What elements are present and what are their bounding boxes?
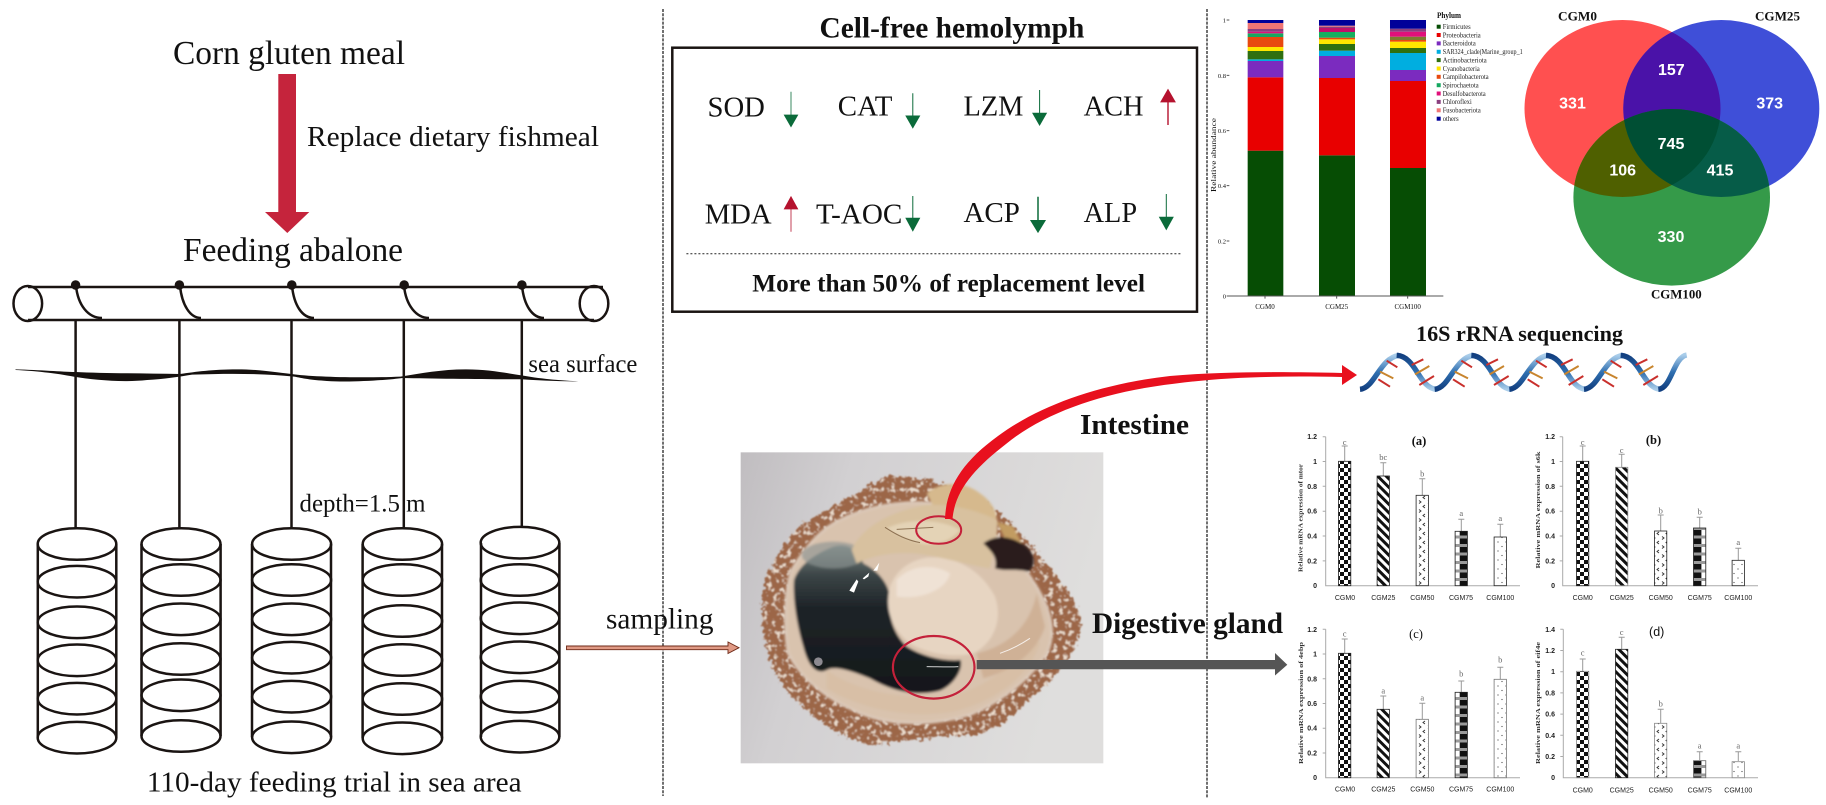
- chart (c): mRNA expression of 4ebp: [1298, 627, 1520, 794]
- axis tick labels: 0.2: [1218, 238, 1226, 246]
- significance letters: [1581, 437, 1740, 547]
- legend: phylum: Firmicutes: [1443, 22, 1471, 31]
- panel letter: (d): [1649, 625, 1664, 639]
- significance letters: b: [1698, 506, 1702, 516]
- highlights: [849, 563, 879, 593]
- x labels: CGM75: [1449, 787, 1473, 794]
- sea surface wave: [16, 369, 578, 382]
- label: sampling: sampling: [606, 603, 714, 635]
- gray patch: [802, 542, 865, 568]
- venn: shared by all: 745: [1658, 136, 1684, 153]
- shell rim: [762, 475, 1081, 745]
- arrow: CAT down: [906, 93, 920, 128]
- panel: cell-free hemolymph: [672, 48, 1197, 312]
- legend: phylum: Campilobacterota: [1443, 72, 1489, 81]
- icon: DNA helix: [1360, 355, 1687, 389]
- label: replace dietary fishmeal: Replace dietary fishmeal: [307, 121, 599, 153]
- marker: ACH: ACH: [1084, 90, 1144, 122]
- cage 1: [38, 528, 116, 754]
- significance letters: c: [1343, 629, 1347, 639]
- x labels: [1573, 787, 1752, 794]
- y ticks: 0.4: [1307, 534, 1317, 540]
- y ticks: 0.2: [1307, 750, 1317, 758]
- venn: CGM0 and CGM100: 106: [1609, 162, 1636, 180]
- x labels: CGM100: [1486, 787, 1514, 794]
- y title: Relative mRNA expression of mtor: [1298, 464, 1304, 572]
- y ticks: 1.2: [1545, 648, 1555, 655]
- significance letters: a: [1698, 740, 1702, 750]
- y ticks: [1307, 434, 1317, 590]
- significance letters: a: [1459, 508, 1463, 518]
- y ticks: 0: [1313, 583, 1317, 590]
- label: sea surface: sea surface: [528, 351, 637, 378]
- x labels: CGM50: [1410, 787, 1434, 794]
- arrow: SOD down: [784, 92, 798, 127]
- significance letters: c: [1581, 437, 1585, 447]
- y ticks: 1: [1551, 459, 1555, 466]
- arrow: ACH up: [1161, 90, 1175, 125]
- significance letters: b: [1459, 669, 1463, 679]
- cage 4: [363, 528, 442, 754]
- arrow: intestine to sequencing: [945, 365, 1357, 519]
- legend: phylum: Fusobacteriota: [1443, 106, 1481, 115]
- cage 5: [481, 527, 559, 752]
- chart: phylum stacked bars: [1209, 10, 1523, 311]
- marker: intestine ring: [916, 516, 961, 544]
- x labels: CGM75: [1688, 595, 1712, 602]
- chart (b): mRNA expression of s6k: [1535, 433, 1758, 602]
- y ticks: 0.6: [1545, 509, 1555, 516]
- heading: feeding abalone: Feeding abalone: [183, 232, 403, 269]
- venn label: CGM0: CGM0: [1558, 9, 1597, 24]
- bars: [1576, 649, 1744, 778]
- legend: phylum: Actinobacteriota: [1443, 55, 1487, 64]
- venn: CGM0 only: 331: [1559, 96, 1586, 112]
- marker: ACP: ACP: [964, 197, 1020, 229]
- venn label: CGM100: CGM100: [1651, 286, 1702, 301]
- x labels: CGM0: [1573, 787, 1593, 794]
- x labels: CGM25: [1610, 787, 1634, 794]
- caption: feeding trial: 110-day feeding trial in sea area: [147, 768, 522, 799]
- legend: phylum: Phylum: [1437, 10, 1461, 20]
- x labels: CGM25: [1371, 787, 1395, 794]
- panel letter: (c): [1409, 627, 1423, 641]
- y ticks: 1.2: [1307, 627, 1317, 634]
- axis tick labels: CGM100: [1394, 303, 1421, 311]
- significance letters: c: [1343, 437, 1347, 447]
- marker: LZM: LZM: [964, 90, 1023, 122]
- y ticks: [1307, 627, 1317, 782]
- y ticks: 0.8: [1307, 484, 1317, 491]
- x labels: CGM0: [1573, 595, 1593, 602]
- muscle: [888, 557, 998, 655]
- marker: SOD: SOD: [708, 92, 765, 124]
- significance letters: [1343, 437, 1502, 523]
- chart: venn diagram: [1524, 9, 1819, 301]
- error bars: [1580, 637, 1741, 761]
- y ticks: [1545, 627, 1555, 782]
- significance letters: a: [1420, 693, 1424, 703]
- venn: CGM25 and CGM100: 415: [1707, 162, 1733, 180]
- left dashed divider: [662, 9, 664, 796]
- y title: Relative mRNA expression of eif4e: [1535, 642, 1542, 764]
- x labels: CGM75: [1688, 787, 1712, 794]
- x labels: CGM25: [1610, 595, 1634, 602]
- y ticks: 0.4: [1307, 726, 1317, 733]
- significance letters: c: [1581, 648, 1585, 658]
- y ticks: 0.2: [1545, 754, 1555, 761]
- x labels: CGM100: [1724, 595, 1752, 602]
- diagram: floating pipe: [13, 282, 608, 321]
- legend: phylum: Desulfobacterota: [1443, 89, 1486, 98]
- x labels: CGM25: [1371, 595, 1395, 602]
- label: digestive gland: Digestive gland: [1092, 608, 1283, 640]
- panel letter: (b): [1646, 433, 1661, 447]
- y ticks: 0.8: [1545, 484, 1555, 491]
- significance letters: a: [1498, 513, 1502, 523]
- significance letters: bc: [1379, 452, 1388, 462]
- bars: [1576, 461, 1744, 586]
- error bars: [1342, 446, 1503, 537]
- significance letters: [1581, 627, 1740, 750]
- arrow: sampling: [566, 642, 739, 654]
- panel letter: (a): [1412, 434, 1426, 448]
- legend: phylum: Spirochaetota: [1443, 80, 1479, 90]
- y ticks: 0.8: [1307, 676, 1317, 683]
- significance letters: b: [1498, 655, 1502, 665]
- arrow: digestive gland to qPCR: [977, 653, 1287, 676]
- x labels: [1573, 595, 1752, 602]
- marker: T-AOC: T-AOC: [816, 198, 902, 230]
- bar: CGM100: [1390, 20, 1426, 296]
- error bars: [1342, 639, 1503, 719]
- arrow: ACP down: [1031, 197, 1045, 232]
- marker: digestive gland ring: [893, 636, 974, 699]
- significance letters: a: [1381, 685, 1385, 695]
- cage 3: [252, 528, 331, 753]
- y ticks: 1: [1313, 652, 1317, 658]
- x labels: CGM50: [1410, 595, 1434, 602]
- dark foot: [794, 545, 961, 693]
- hanging ropes: [76, 320, 522, 528]
- y ticks: 0: [1313, 775, 1317, 782]
- right dashed divider: [1206, 9, 1208, 798]
- chart (a): mRNA expression of mTOR: [1298, 434, 1520, 602]
- axis tick labels: 0: [1223, 294, 1226, 300]
- bar: CGM0: [1248, 20, 1283, 296]
- axis tick labels: 1: [1223, 18, 1226, 24]
- x labels: CGM0: [1335, 787, 1355, 794]
- venn label: CGM25: CGM25: [1755, 9, 1800, 24]
- culture cages: [38, 527, 559, 754]
- axis tick labels: CGM0: [1255, 303, 1275, 311]
- significance letters: a: [1736, 740, 1740, 750]
- arrow: MDA up: [784, 197, 798, 232]
- significance letters: a: [1736, 537, 1740, 547]
- label: intestine: Intestine: [1080, 409, 1189, 441]
- y ticks: [1545, 434, 1555, 590]
- marker: CAT: CAT: [838, 90, 893, 122]
- legend: phylum: Proteobacteria: [1443, 30, 1481, 39]
- arrow: ALP down: [1160, 194, 1173, 229]
- x labels: CGM50: [1649, 595, 1673, 602]
- y ticks: 0.6: [1307, 509, 1317, 516]
- x labels: CGM50: [1649, 787, 1673, 794]
- y ticks: 1: [1551, 669, 1555, 676]
- y ticks: 1.2: [1307, 434, 1317, 441]
- axis tick labels: 0.8: [1218, 73, 1226, 80]
- cage 2: [142, 528, 221, 752]
- axis title: Relative abundance: [1209, 117, 1218, 192]
- y ticks: 0.6: [1545, 712, 1555, 719]
- axis tick labels: 0.6: [1218, 128, 1227, 135]
- legend: phylum: [1437, 10, 1523, 123]
- significance letters: b: [1659, 505, 1663, 515]
- axis tick labels: [1218, 18, 1421, 311]
- y ticks: 1: [1313, 459, 1317, 466]
- x labels: [1335, 787, 1514, 794]
- mantle: [785, 502, 1052, 723]
- arrow: T-AOC down: [906, 196, 920, 231]
- heading: 16S rRNA sequencing: 16S rRNA sequencing: [1416, 321, 1623, 346]
- y ticks: 0.4: [1545, 733, 1555, 740]
- y ticks: 0.8: [1545, 690, 1555, 697]
- y ticks: 0.2: [1307, 558, 1317, 565]
- marker: MDA: MDA: [705, 198, 772, 230]
- bar: CGM25: [1319, 20, 1355, 296]
- error bars: [1580, 446, 1741, 560]
- significance letters: [1343, 629, 1502, 703]
- venn: CGM25 only: 373: [1756, 96, 1783, 112]
- legend: phylum: SAR324_clade(Marine_group_1: [1443, 47, 1523, 56]
- arrow: LZM down: [1033, 90, 1046, 125]
- significance letters: c: [1620, 445, 1624, 455]
- x labels: CGM100: [1486, 595, 1514, 602]
- y ticks: 0.2: [1545, 558, 1555, 565]
- legend: phylum: Cyanobacteria: [1443, 64, 1480, 73]
- chart (d): mRNA expression of eif4e: [1535, 625, 1758, 794]
- y title: Relative mRNA expression of 4ebp: [1298, 642, 1305, 764]
- legend: phylum: others: [1443, 114, 1459, 123]
- y ticks: 0.4: [1545, 534, 1555, 540]
- bars: [1338, 653, 1506, 778]
- heading: corn gluten meal: Corn gluten meal: [173, 35, 405, 72]
- marker: ALP: ALP: [1084, 197, 1137, 229]
- venn: CGM100 only: 330: [1658, 229, 1684, 246]
- x labels: [1335, 595, 1514, 602]
- arrow: replace fishmeal: [265, 74, 309, 233]
- legend: phylum: Chloroflexi: [1443, 97, 1472, 106]
- y ticks: 0: [1551, 775, 1555, 782]
- x labels: CGM0: [1335, 595, 1355, 602]
- axis tick labels: 0.4: [1218, 183, 1227, 190]
- y title: Relative mRNA expression of s6k: [1535, 451, 1542, 569]
- dark organ: [983, 537, 1034, 572]
- y ticks: 0: [1551, 583, 1555, 590]
- venn: CGM0 and CGM25: 157: [1658, 62, 1685, 79]
- axis tick labels: CGM25: [1325, 303, 1349, 311]
- bars: [1338, 461, 1506, 586]
- gill body: [927, 484, 997, 520]
- legend: phylum: Bacteroidota: [1443, 39, 1476, 48]
- y ticks: 0.6: [1307, 701, 1317, 708]
- x labels: CGM75: [1449, 595, 1473, 602]
- significance letters: b: [1420, 469, 1424, 479]
- y ticks: 1.4: [1545, 627, 1555, 634]
- significance letters: c: [1620, 627, 1624, 637]
- significance letters: b: [1659, 699, 1663, 709]
- photo: abalone: [741, 452, 1103, 763]
- panel heading: cell-free hemolymph: Cell-free hemolymph: [820, 12, 1084, 44]
- note: replacement level: More than 50% of replacement level: [752, 271, 1145, 298]
- label: depth: depth=1.5 m: [300, 491, 426, 518]
- y ticks: 1.2: [1545, 434, 1555, 441]
- x labels: CGM100: [1724, 787, 1752, 794]
